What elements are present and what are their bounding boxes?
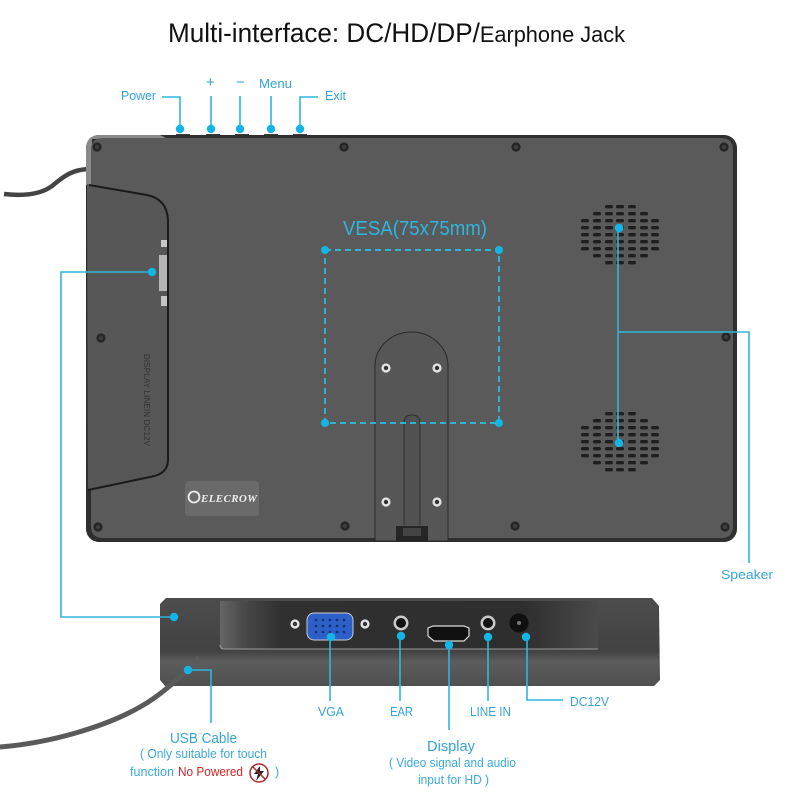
callout: Display: input for HD ) (418, 773, 489, 787)
HDMI port (428, 626, 469, 641)
top silver edge (86, 135, 337, 185)
recess lip (220, 645, 598, 649)
back surface (91, 138, 733, 538)
side unit (160, 598, 660, 686)
title: Multi-interface: DC/HD/DP/Earphone Jack (168, 18, 626, 48)
callout: EAR: EAR (390, 704, 413, 719)
top buttons (176, 134, 307, 138)
callout: LINE IN: LINE IN (470, 704, 511, 719)
icon: no power (250, 764, 268, 782)
callout: USB Cable: No Powered (178, 765, 243, 779)
cover slot (161, 240, 167, 247)
VESA dashed square (321, 246, 503, 427)
DC jack (510, 614, 528, 632)
cover label: DISPLAY LINEIN DC12V (142, 354, 151, 447)
speaker grille top (581, 205, 659, 264)
callout: USB Cable: function (130, 765, 174, 779)
EAR jack (394, 616, 408, 630)
callout: USB Cable (130, 666, 279, 782)
logo badge: ELECROW (200, 493, 258, 505)
label: plus: + (206, 74, 215, 91)
cover outline (88, 185, 168, 490)
callouts: top buttons (121, 74, 346, 133)
callout: USB Cable: USB Cable (170, 730, 237, 747)
callout: Display: Display (427, 738, 475, 755)
callout: VGA (318, 633, 344, 719)
top cable (4, 169, 88, 195)
connector recess (220, 601, 598, 649)
label: Power: Power (121, 88, 157, 103)
callout: Display: ( Video signal and audio (389, 756, 516, 770)
callout: speaker (615, 224, 774, 582)
unit body (160, 598, 660, 686)
callout: VGA to side (61, 268, 178, 621)
speaker grille bottom (581, 412, 659, 471)
label: Exit: Exit (325, 88, 346, 103)
callout: USB Cable: ) (275, 765, 279, 779)
label: Speaker: Speaker (721, 567, 774, 582)
logo badge (185, 481, 259, 516)
USB cable (0, 658, 199, 747)
VGA port (290, 613, 370, 640)
stand bracket (375, 332, 448, 541)
VGA opening (159, 255, 167, 291)
callout: VGA: VGA (318, 704, 344, 719)
callout: Display (389, 641, 516, 787)
screws (92, 142, 731, 532)
monitor rear panel (86, 134, 737, 542)
callout: DC12V (522, 633, 609, 709)
LINE IN jack (480, 616, 496, 630)
left cover (87, 184, 168, 490)
label: minus: − (236, 74, 245, 91)
callout: LINE IN (470, 633, 511, 719)
body edge (86, 135, 737, 542)
label: Menu: Menu (259, 76, 292, 91)
callout: EAR (390, 632, 413, 719)
VESA label: VESA(75x75mm) (343, 218, 487, 240)
callout: USB Cable: ( Only suitable for touch (140, 747, 267, 761)
callout: DC12V: DC12V (570, 694, 609, 709)
